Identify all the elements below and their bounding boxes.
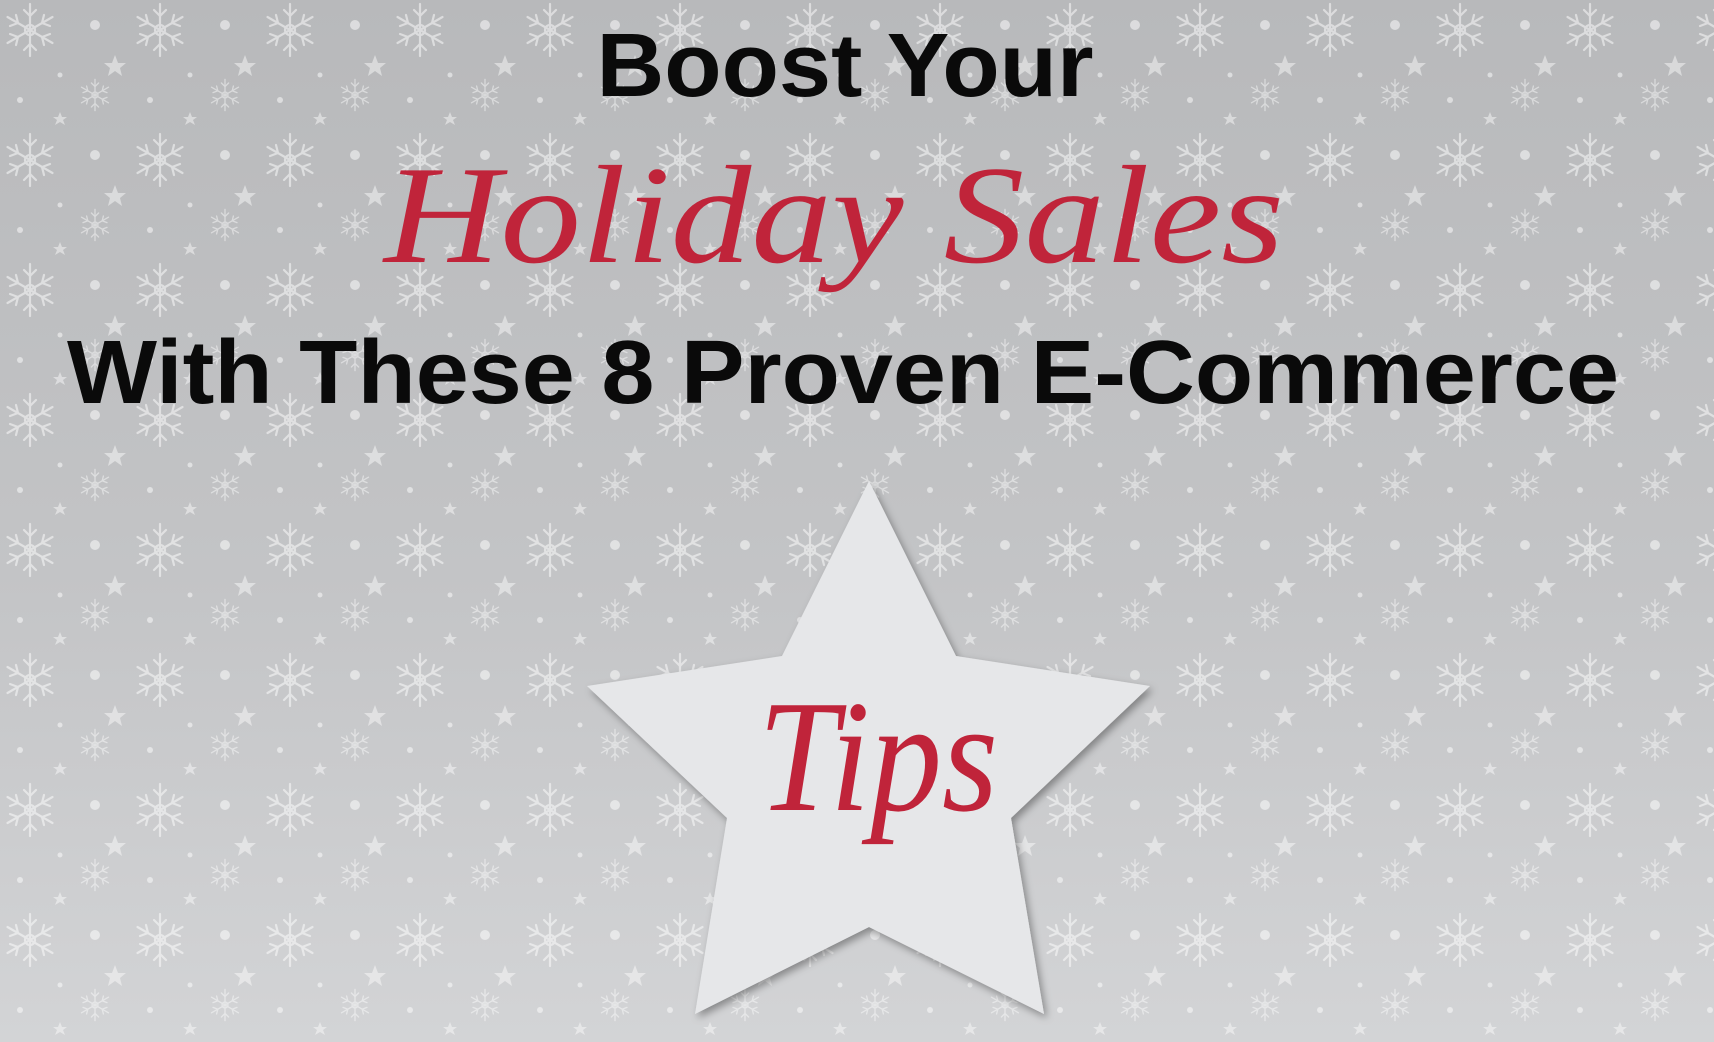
- subtitle: With These 8 Proven E-Commerce: With These 8 Proven E-Commerce: [67, 323, 1619, 423]
- label: Tips: Tips: [758, 667, 998, 845]
- title: Holiday Sales script: Holiday Sales: [382, 138, 1284, 293]
- title: Boost Your: Boost Your: [596, 16, 1094, 116]
- star badge with Tips: [587, 481, 1150, 1014]
